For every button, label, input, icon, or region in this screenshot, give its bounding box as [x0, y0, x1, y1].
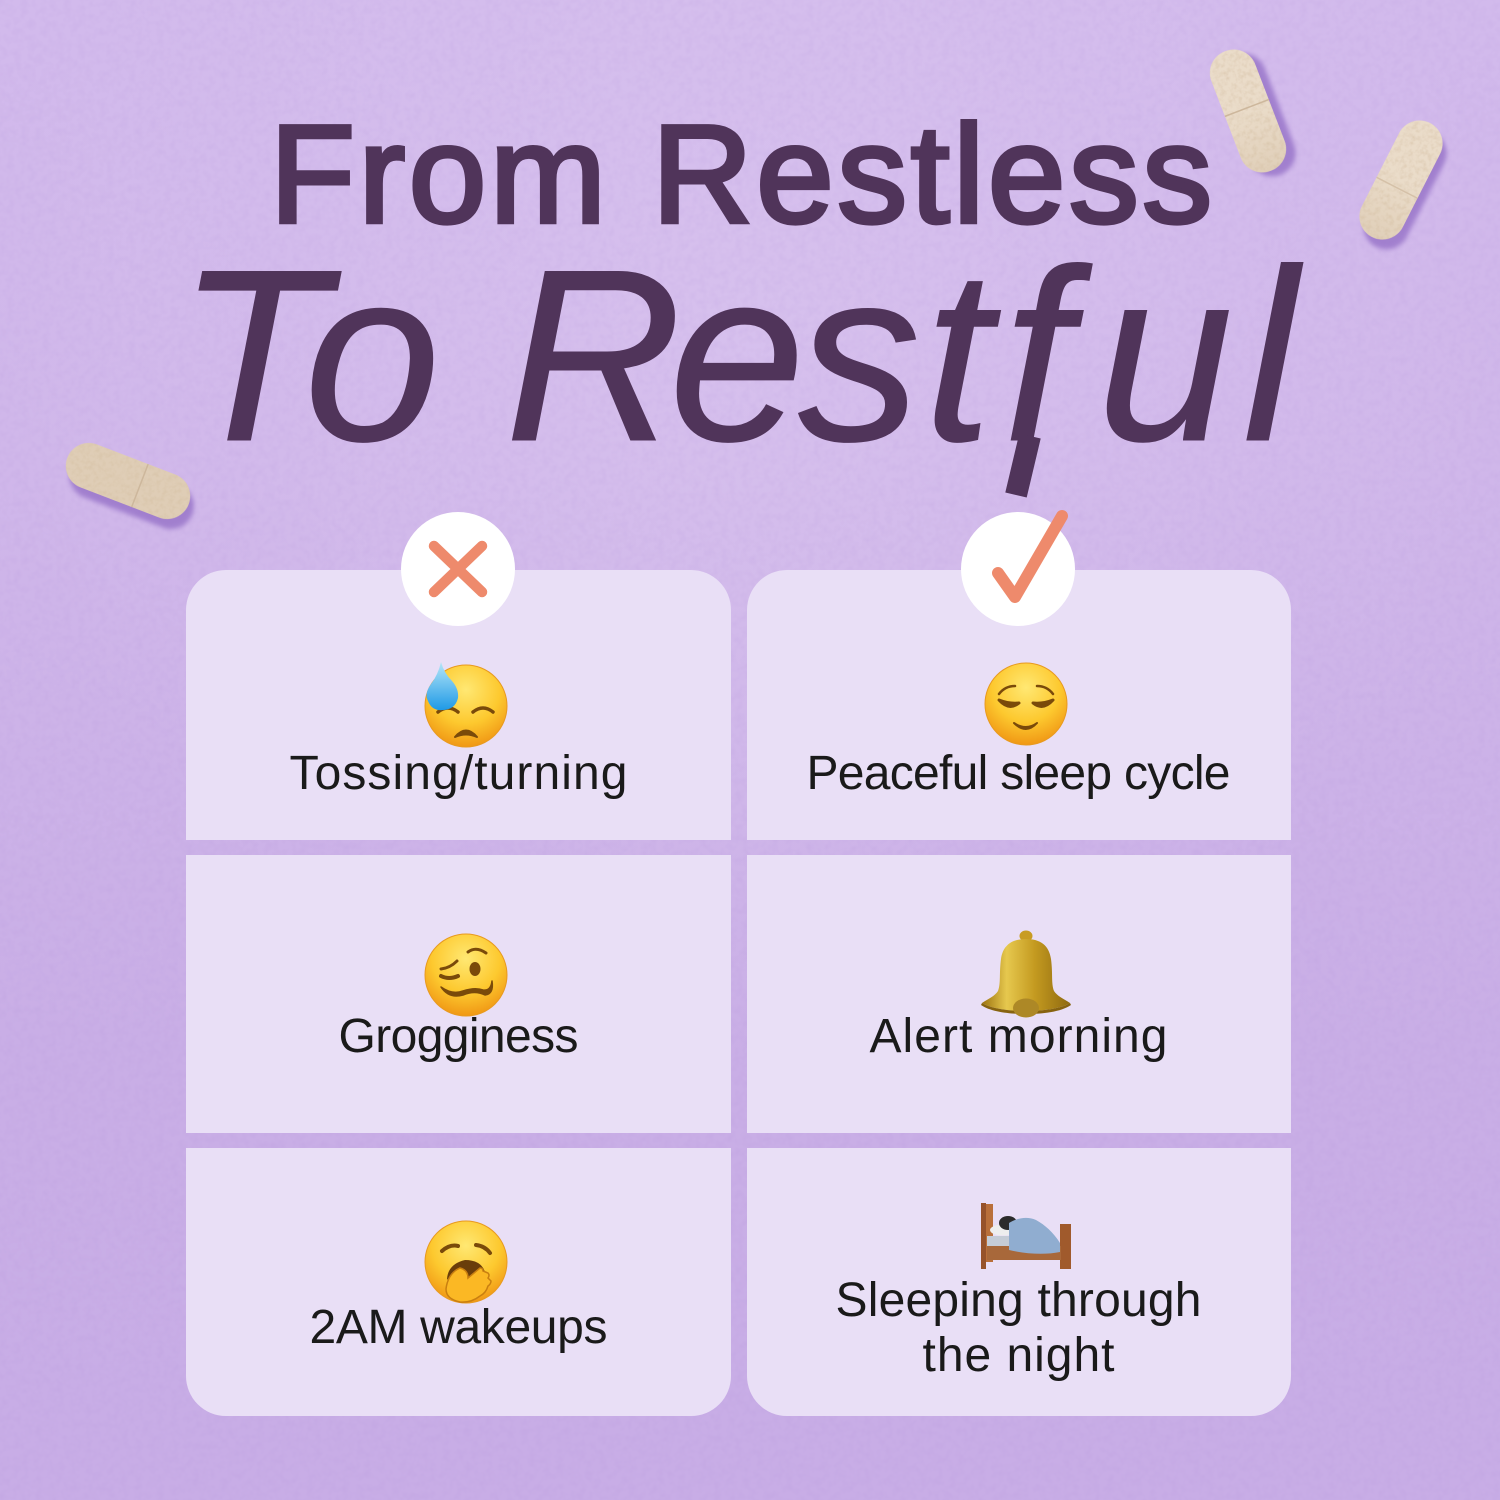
emoji: bell	[981, 930, 1071, 1018]
emoji: person in bed	[981, 1203, 1071, 1269]
panel: restless column	[186, 570, 731, 1416]
card: sleeping through the night	[747, 1148, 1291, 1416]
label: peaceful sleep cycle: Peaceful sleep cycle	[806, 747, 1230, 800]
label: 2AM wakeups: 2AM wakeups	[310, 1301, 608, 1354]
card: grogginess	[186, 855, 731, 1133]
emoji: downcast face with sweat	[425, 662, 507, 747]
panel: restful column	[747, 570, 1291, 1416]
label: sleeping through the night: the night	[922, 1329, 1114, 1382]
label: grogginess: Grogginess	[338, 1010, 578, 1063]
label: sleeping through the night: Sleeping through	[836, 1274, 1202, 1327]
capsule: left	[56, 436, 203, 536]
card: alert morning	[747, 855, 1291, 1133]
label: alert morning: Alert morning	[870, 1010, 1168, 1063]
title line 2: To	[177, 218, 440, 492]
label: tossing/turning: Tossing/turning	[290, 747, 628, 800]
label: sleeping through the night	[836, 1274, 1202, 1382]
capsule: top center	[1203, 40, 1302, 186]
emoji: relieved face	[985, 663, 1067, 745]
title line 2	[177, 218, 1303, 495]
emoji: yawning face	[425, 1221, 507, 1303]
title	[177, 97, 1303, 495]
card: peaceful sleep cycle	[747, 570, 1291, 840]
card: 2AM wakeups	[186, 1148, 731, 1416]
icon: cross badge	[401, 512, 515, 626]
card: tossing/turning	[186, 570, 731, 840]
capsule: top right	[1348, 113, 1458, 257]
emoji: woozy face	[425, 934, 507, 1016]
title line 1: From Restless	[270, 97, 1212, 252]
title line 2: Restful	[505, 218, 1303, 492]
icon: check badge	[961, 512, 1075, 626]
